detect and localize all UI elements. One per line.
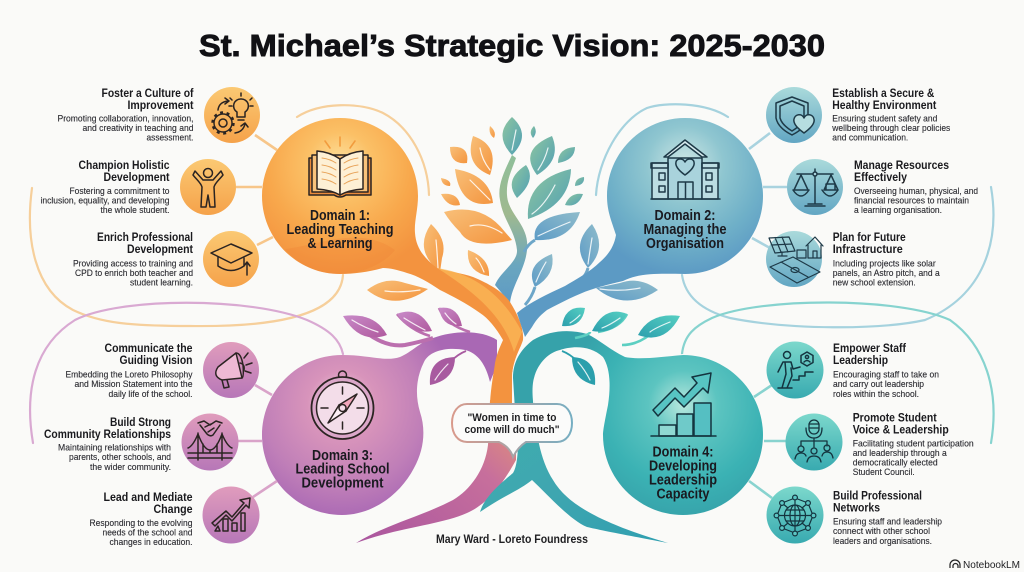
domain 4 bubble xyxy=(513,308,763,515)
item: foster a culture of improvement xyxy=(58,86,260,143)
item: plan for future infrastructure xyxy=(766,230,940,288)
leaf veins xyxy=(385,130,640,292)
tree root: purple xyxy=(356,400,516,543)
text: enrich professional development: Providing access to training and xyxy=(73,258,193,268)
spokes xyxy=(749,133,787,248)
text: build strong community relationships: Community Relationships xyxy=(44,427,171,441)
text: promote student voice and leadership: Facilitating student participation xyxy=(853,438,974,448)
text: lead and mediate change: Change xyxy=(154,502,193,516)
text: enrich professional development: CPD to enrich both teacher and xyxy=(75,268,193,278)
text: establish a secure and healthy environment: Establish a Secure & xyxy=(832,86,935,100)
text: build professional networks: connect with other school xyxy=(833,526,930,536)
text: lead and mediate change: Lead and Mediate xyxy=(104,490,193,504)
text: foster a culture of improvement: Foster a Culture of xyxy=(102,86,194,100)
quote callout xyxy=(452,404,572,457)
text: foster a culture of improvement xyxy=(58,86,194,142)
domain 4 heading: Developing xyxy=(649,458,717,474)
text: plan for future infrastructure: Infrastructure xyxy=(833,242,903,256)
text: communicate the guiding vision: daily life of the school. xyxy=(108,389,192,399)
text: promote student voice and leadership xyxy=(853,410,974,477)
item: empower staff leadership xyxy=(766,341,939,399)
text: lead and mediate change: needs of the school and xyxy=(102,528,192,538)
domain 1 heading xyxy=(286,208,394,252)
icon: handshake and bridge xyxy=(188,421,232,460)
text: empower staff leadership: roles within the school. xyxy=(833,389,919,399)
text: manage resources effectively: Manage Resources xyxy=(854,158,949,172)
text: enrich professional development: Development xyxy=(127,242,193,256)
item: promote student voice and leadership xyxy=(786,410,974,477)
tree stem xyxy=(495,155,527,303)
text: enrich professional development: Enrich Professional xyxy=(97,230,193,244)
icon: globe network xyxy=(774,495,816,536)
text: foster a culture of improvement: Improvement xyxy=(128,98,194,112)
decorative connecting loops xyxy=(30,104,994,443)
spokes xyxy=(749,385,787,498)
quote callout: come will do much" xyxy=(464,424,560,436)
text: plan for future infrastructure xyxy=(833,230,940,288)
item: lead and mediate change xyxy=(90,486,260,547)
item: enrich professional development xyxy=(73,230,259,288)
text: build strong community relationships: Build Strong xyxy=(110,415,171,429)
item: champion holistic development xyxy=(40,158,236,215)
text: empower staff leadership xyxy=(833,341,939,399)
text: promote student voice and leadership: democratically elected xyxy=(853,458,938,468)
text: lead and mediate change: changes in education. xyxy=(110,537,192,547)
item: establish a secure and healthy environment xyxy=(766,86,951,143)
domain 1 heading: & Learning xyxy=(308,236,372,252)
domain 4 heading: Capacity xyxy=(656,486,710,502)
text: promote student voice and leadership: and leadership through a xyxy=(853,448,947,458)
text: establish a secure and healthy environment: Ensuring student safety and xyxy=(832,114,937,124)
text: empower staff leadership: and carry out leadership xyxy=(833,379,924,389)
tree root: teal xyxy=(480,400,668,543)
text: plan for future infrastructure: Including projects like solar xyxy=(833,258,936,268)
quote callout: "Women in time to xyxy=(468,412,557,424)
domain 3 heading: Domain 3: xyxy=(312,448,373,464)
text: communicate the guiding vision: Communicate the xyxy=(104,341,193,355)
text: build professional networks: leaders and organisations. xyxy=(833,536,932,546)
icon: growth chart xyxy=(212,498,250,531)
text: empower staff leadership: Empower Staff xyxy=(833,341,906,355)
text: build strong community relationships: the wider community. xyxy=(90,462,171,472)
text: foster a culture of improvement: Promoting collaboration, innovation, xyxy=(58,114,194,124)
text: manage resources effectively: a learning organisation. xyxy=(854,205,942,215)
text: foster a culture of improvement: and creativity in teaching and xyxy=(82,123,194,133)
text: champion holistic development: inclusion, equality, and developing xyxy=(40,196,170,206)
panel: Domain 1 xyxy=(40,86,523,405)
text: communicate the guiding vision: and Mission Statement into the xyxy=(74,379,192,389)
panel: Domain 4 xyxy=(513,308,974,546)
text: plan for future infrastructure: new school extension. xyxy=(833,278,916,288)
text: build professional networks: Ensuring staff and leadership xyxy=(833,516,942,526)
green and blue leaves xyxy=(502,117,584,219)
icon: microphone and students xyxy=(795,420,833,462)
text: establish a secure and healthy environment: wellbeing through clear policies xyxy=(831,123,951,133)
NotebookLM watermark: NotebookLM xyxy=(963,559,1020,571)
text: plan for future infrastructure: panels, an Astro pitch, and a xyxy=(833,268,940,278)
domain 1 heading: Leading Teaching xyxy=(286,222,394,238)
orange leaves xyxy=(367,126,512,301)
domain 3 bubble xyxy=(262,308,497,515)
text: enrich professional development: student learning. xyxy=(130,278,193,288)
text: establish a secure and healthy environment xyxy=(831,86,951,142)
panel: Domain 3 xyxy=(44,308,497,547)
icon: person climbing steps xyxy=(778,352,813,388)
item: communicate the guiding vision xyxy=(66,341,259,399)
title: St. Michael’s Strategic Vision: 2025-2030 xyxy=(199,28,825,63)
icon: balance scales xyxy=(793,169,838,206)
attribution: Mary Ward - Loreto Foundress xyxy=(436,532,588,546)
text: champion holistic development xyxy=(40,158,170,215)
icon: megaphone xyxy=(216,353,252,388)
domain 2 heading xyxy=(644,208,726,252)
text: champion holistic development: Development xyxy=(104,170,170,184)
icon: graduation cap xyxy=(211,244,252,275)
text: build strong community relationships: parents, other schools, and xyxy=(69,452,171,462)
text: champion holistic development: the whole student. xyxy=(100,205,170,215)
text: communicate the guiding vision: Guiding Vision xyxy=(120,353,192,367)
icon: school building xyxy=(651,140,720,199)
icon: open book xyxy=(309,137,371,197)
domain 4 heading xyxy=(649,444,717,502)
text: empower staff leadership: Leadership xyxy=(833,353,888,367)
item: build strong community relationships xyxy=(44,414,238,472)
domain 2 heading: Organisation xyxy=(646,236,724,252)
text: establish a secure and healthy environment: and communication. xyxy=(832,132,908,142)
icon: person with raised arms xyxy=(193,168,223,207)
text: establish a secure and healthy environment: Healthy Environment xyxy=(832,98,936,112)
text: lead and mediate change: Responding to the evolving xyxy=(90,518,192,528)
icon: rising chart xyxy=(651,373,716,436)
text: lead and mediate change xyxy=(90,490,193,547)
text: plan for future infrastructure: Plan for Future xyxy=(833,230,906,244)
domain 1 heading: Domain 1: xyxy=(310,208,370,224)
domain 4 heading: Leadership xyxy=(649,472,717,488)
text: build professional networks: Build Professional xyxy=(833,488,922,502)
domain 2 heading: Managing the xyxy=(644,222,726,238)
text: enrich professional development xyxy=(73,230,193,288)
spokes xyxy=(236,135,277,245)
icon: compass xyxy=(312,371,374,439)
domain 2 heading: Domain 2: xyxy=(654,208,716,224)
panel: Domain 2 xyxy=(517,86,978,337)
item: manage resources effectively xyxy=(787,158,978,215)
text: champion holistic development: Champion Holistic xyxy=(78,158,170,172)
domain 3 heading xyxy=(296,448,390,492)
text: communicate the guiding vision xyxy=(66,341,193,399)
text: build professional networks xyxy=(833,488,942,546)
spokes xyxy=(238,385,277,497)
text: manage resources effectively: Effectively xyxy=(854,170,907,184)
icon: shield with heart xyxy=(776,97,814,135)
domain 1 bubble xyxy=(262,118,523,405)
text: promote student voice and leadership: Voice & Leadership xyxy=(853,422,949,436)
domain 3 heading: Development xyxy=(302,476,384,492)
text: build strong community relationships xyxy=(44,415,171,472)
item: build professional networks xyxy=(766,486,942,546)
text: promote student voice and leadership: Promote Student xyxy=(853,410,937,424)
text: manage resources effectively: financial resources to maintain xyxy=(854,196,969,206)
domain 2 bubble xyxy=(517,118,763,337)
text: foster a culture of improvement: assessment. xyxy=(146,132,194,142)
icon: NotebookLM logo xyxy=(950,560,960,568)
text: manage resources effectively: Overseeing human, physical, and xyxy=(854,186,978,196)
central tree canopy leaves xyxy=(367,117,658,305)
domain 4 heading: Domain 4: xyxy=(652,444,714,460)
icon: gear and lightbulb xyxy=(212,93,253,134)
domain 3 heading: Leading School xyxy=(296,462,390,478)
icon: solar panel, school and pitch xyxy=(769,237,823,283)
text: communicate the guiding vision: Embedding the Loreto Philosophy xyxy=(66,370,193,380)
text: manage resources effectively xyxy=(854,158,978,215)
text: promote student voice and leadership: Student Council. xyxy=(853,467,915,477)
text: build strong community relationships: Maintaining relationships with xyxy=(58,442,171,452)
text: champion holistic development: Fostering a commitment to xyxy=(70,186,170,196)
text: empower staff leadership: Encouraging staff to take on xyxy=(833,370,939,380)
text: build professional networks: Networks xyxy=(833,500,880,514)
